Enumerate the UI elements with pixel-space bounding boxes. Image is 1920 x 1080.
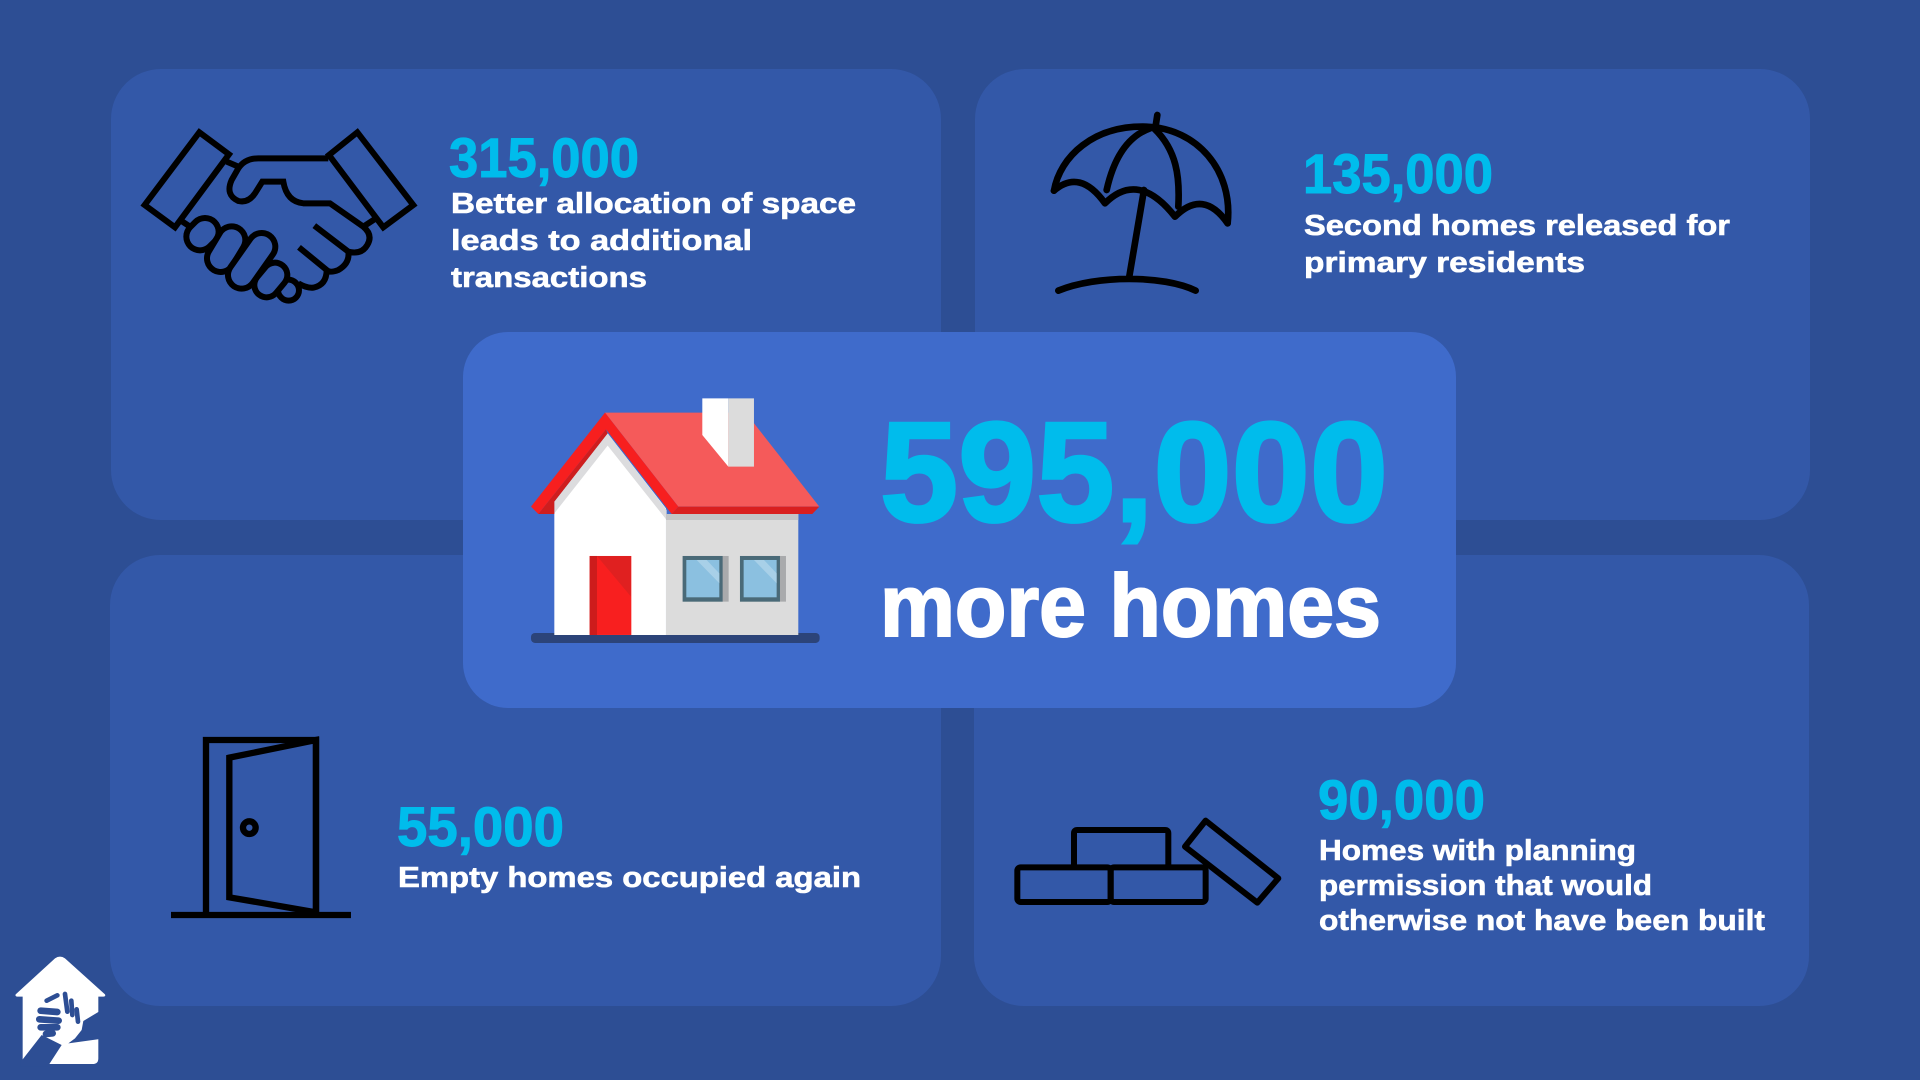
stat: 595,000: 595,000: [880, 393, 1388, 552]
panel: better allocation: [111, 69, 941, 520]
panel: central total: [463, 332, 1456, 708]
stat: 135,000: 135,000: [1303, 142, 1493, 205]
text: second homes description: primary residents: [1304, 247, 1585, 279]
text: planning permission description: Homes with planning: [1319, 835, 1636, 867]
icon: beach umbrella: [1054, 115, 1228, 291]
stat: 90,000: 90,000: [1318, 768, 1485, 831]
icon: logo: [15, 957, 105, 1067]
stat: 55,000: 55,000: [397, 795, 564, 858]
text: planning permission description: otherwise not have been built: [1319, 905, 1765, 937]
text: better allocation description: transactions: [451, 262, 647, 294]
icon: house: [531, 398, 820, 643]
panel: planning permission: [974, 555, 1809, 1006]
icon: open door: [171, 740, 351, 915]
text: planning permission description: permission that would: [1319, 870, 1652, 902]
text: second homes description: Second homes released for: [1304, 210, 1730, 242]
icon: handshake: [145, 132, 413, 290]
text: better allocation description: [451, 188, 856, 294]
text: more homes: more homes: [880, 556, 1381, 655]
text: better allocation description: leads to additional: [451, 225, 752, 257]
icon: bricks: [1017, 821, 1278, 903]
stat: 315,000: 315,000: [449, 126, 639, 189]
panel: empty homes: [110, 555, 941, 1006]
text: better allocation description: Better allocation of space: [451, 188, 856, 220]
text: empty homes description: Empty homes occupied again: [398, 862, 861, 894]
text: second homes description: [1304, 210, 1730, 279]
panel: second homes: [975, 69, 1810, 520]
text: planning permission description: [1319, 835, 1765, 937]
